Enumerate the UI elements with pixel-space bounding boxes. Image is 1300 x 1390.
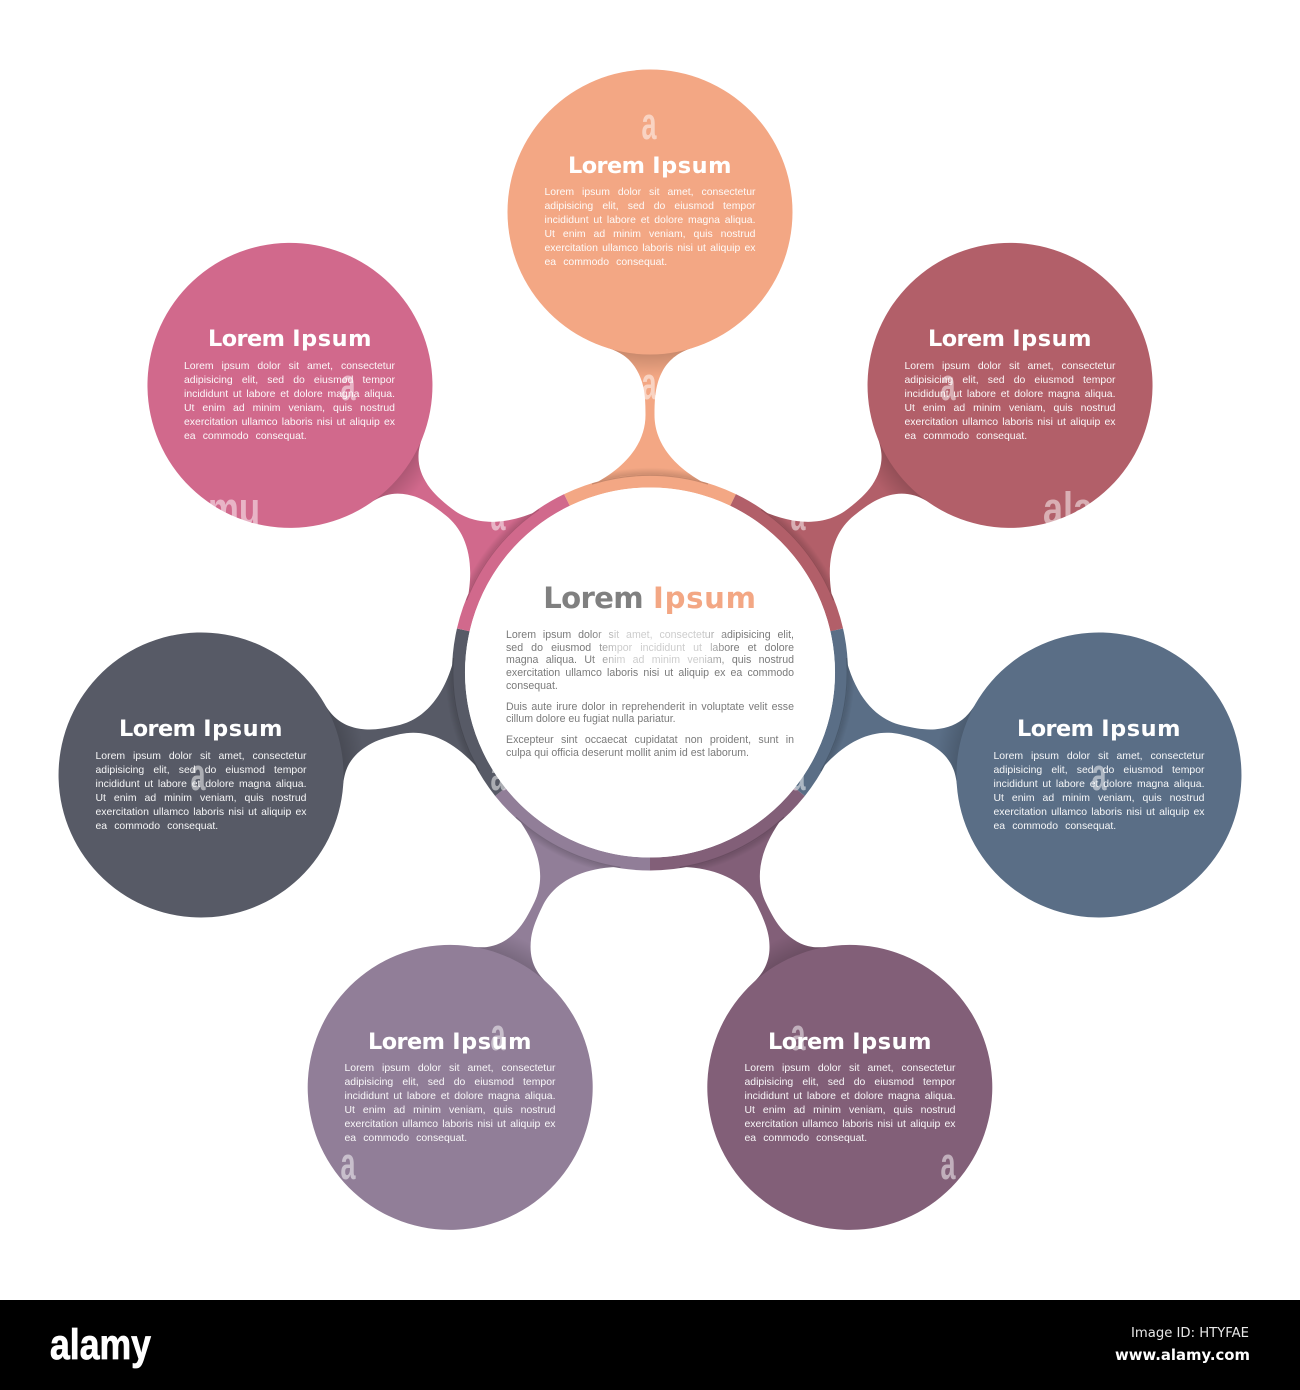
mauve body text: incididunt ut labore et dolore magna aliqua.: [344, 1091, 556, 1102]
brick body text: exercitation ullamco laboris nisi ut aliquip ex: [904, 417, 1116, 428]
blue heading: Lorem Ipsum: [1017, 716, 1181, 742]
mauve body text: exercitation ullamco laboris nisi ut aliquip ex: [344, 1119, 556, 1130]
watermark glyphs: a: [940, 1138, 956, 1189]
blue body text: exercitation ullamco laboris nisi ut aliquip ex: [994, 807, 1204, 818]
mauve body text: ea commodo consequat.: [344, 1133, 467, 1144]
watermark glyphs: a: [642, 358, 657, 409]
image id: Image ID: HTYFAE: [1131, 1325, 1249, 1341]
dark gray body text: Ut enim ad minim veniam, quis nostrud: [96, 793, 306, 804]
dark gray heading: Lorem Ipsum: [119, 716, 283, 742]
watermark glyphs: a: [790, 1009, 806, 1060]
mauve body text: Lorem ipsum dolor sit amet, consectetur: [344, 1063, 556, 1074]
orange heading: Lorem Ipsum: [568, 153, 732, 179]
pink heading: Lorem Ipsum: [208, 326, 372, 352]
orange body text: Ut enim ad minim veniam, quis nostrud: [544, 229, 756, 240]
pink body text: [184, 361, 395, 442]
watermark glyphs: a: [642, 98, 657, 149]
mauve body text: Ut enim ad minim veniam, quis nostrud: [344, 1105, 556, 1116]
watermark glyphs: a: [190, 749, 206, 800]
watermark glyphs: a: [790, 749, 806, 800]
plum body text: adipisicing elit, sed do eiusmod tempor: [744, 1077, 956, 1088]
panel: plum circle with connector: [594, 761, 1040, 1278]
brick body text: adipisicing elit, sed do eiusmod tempor: [904, 375, 1116, 386]
blue body text: Lorem ipsum dolor sit amet, consectetur: [994, 751, 1204, 762]
watermark glyphs: a: [490, 749, 506, 800]
watermark glyphs: ala: [1043, 483, 1094, 534]
watermark glyphs: [190, 98, 1107, 1189]
mauve body text: adipisicing elit, sed do eiusmod tempor: [344, 1077, 556, 1088]
website: www.alamy.com: [1115, 1346, 1250, 1364]
plum heading: Lorem Ipsum: [768, 1029, 932, 1055]
center body text: consequat.: [506, 680, 558, 692]
center body text: [506, 629, 794, 759]
center body text: Lorem ipsum dolor sit amet, consectetur adipisicing elit,: [506, 629, 794, 641]
mauve heading: Lorem Ipsum: [368, 1029, 532, 1055]
center heading: Lorem Ipsum: [543, 581, 757, 615]
watermark glyphs: mu: [208, 483, 260, 534]
plum body text: Lorem ipsum dolor sit amet, consectetur: [744, 1063, 956, 1074]
orange body text: adipisicing elit, sed do eiusmod tempor: [544, 201, 756, 212]
blue body text: adipisicing elit, sed do eiusmod tempor: [994, 765, 1204, 776]
mauve body text: [344, 1063, 556, 1144]
plum body text: incididunt ut labore et dolore magna aliqua.: [744, 1091, 956, 1102]
dark gray body text: ea commodo consequat.: [96, 821, 218, 832]
dark gray body text: [96, 751, 306, 832]
center body text: Excepteur sint occaecat cupidatat non proident, sunt in: [506, 734, 794, 746]
orange body text: Lorem ipsum dolor sit amet, consectetur: [544, 187, 756, 198]
pink body text: adipisicing elit, sed do eiusmod tempor: [184, 375, 395, 386]
plum body text: Ut enim ad minim veniam, quis nostrud: [744, 1105, 956, 1116]
panel: blue circle with connector: [781, 571, 1270, 946]
watermark glyphs: a: [490, 1009, 506, 1060]
pink body text: incididunt ut labore et dolore magna aliqua.: [184, 389, 395, 400]
dark gray body text: exercitation ullamco laboris nisi ut aliquip ex: [96, 807, 306, 818]
orange body text: ea commodo consequat.: [544, 257, 667, 268]
panel: mauve circle with connector: [260, 761, 706, 1278]
plum body text: exercitation ullamco laboris nisi ut aliquip ex: [744, 1119, 956, 1130]
brick body text: incididunt ut labore et dolore magna aliqua.: [904, 389, 1116, 400]
brick heading: Lorem Ipsum: [928, 326, 1092, 352]
footer bar: [0, 1300, 1300, 1390]
watermark glyphs: a: [340, 359, 356, 410]
center body text: sed do eiusmod tempor incididunt ut labore et dolore: [506, 642, 794, 654]
panel: center white circle: [465, 488, 835, 858]
watermark glyphs: a: [340, 1138, 356, 1189]
blue body text: Ut enim ad minim veniam, quis nostrud: [994, 793, 1204, 804]
center body text: exercitation ullamco laboris nisi ut aliquip ex ea commodo: [506, 667, 794, 679]
orange body text: [544, 187, 756, 268]
pink body text: ea commodo consequat.: [184, 431, 307, 442]
watermark glyphs: a: [940, 359, 956, 410]
dark gray body text: incididunt ut labore et dolore magna aliqua.: [96, 779, 306, 790]
orange body text: incididunt ut labore et dolore magna aliqua.: [544, 215, 756, 226]
dark gray body text: adipisicing elit, sed do eiusmod tempor: [96, 765, 306, 776]
blue body text: ea commodo consequat.: [994, 821, 1116, 832]
watermark fade over center text: [590, 629, 730, 667]
center body text: culpa qui officia deserunt mollit anim id est laborum.: [506, 747, 749, 759]
watermark glyphs: a: [1092, 749, 1107, 800]
blue body text: incididunt ut labore et dolore magna aliqua.: [994, 779, 1204, 790]
pink body text: exercitation ullamco laboris nisi ut aliquip ex: [184, 417, 395, 428]
brick body text: [904, 361, 1116, 442]
brick body text: Ut enim ad minim veniam, quis nostrud: [904, 403, 1116, 414]
panel: orange circle with connector: [508, 70, 792, 506]
pink body text: Ut enim ad minim veniam, quis nostrud: [184, 403, 395, 414]
plum body text: ea commodo consequat.: [744, 1133, 867, 1144]
brick body text: ea commodo consequat.: [904, 431, 1027, 442]
orange body text: exercitation ullamco laboris nisi ut aliquip ex: [544, 243, 756, 254]
pink body text: Lorem ipsum dolor sit amet, consectetur: [184, 361, 395, 372]
watermark glyphs: a: [490, 489, 506, 540]
brick body text: Lorem ipsum dolor sit amet, consectetur: [904, 361, 1116, 372]
panel: dark gray circle with connector: [30, 571, 519, 946]
blue body text: [994, 751, 1204, 832]
center body text: magna aliqua. Ut enim ad minim veniam, quis nostrud: [506, 654, 794, 666]
plum body text: [744, 1063, 956, 1144]
dark gray body text: Lorem ipsum dolor sit amet, consectetur: [96, 751, 306, 762]
logo: alamy: alamy: [50, 1321, 151, 1369]
panel: brick red circle with connector: [691, 185, 1210, 680]
center body text: cillum dolore eu fugiat nulla pariatur.: [506, 713, 676, 725]
panel: pink circle with connector: [90, 185, 609, 680]
watermark glyphs: a: [790, 489, 806, 540]
center body text: Duis aute irure dolor in reprehenderit in voluptate velit esse: [506, 701, 794, 713]
